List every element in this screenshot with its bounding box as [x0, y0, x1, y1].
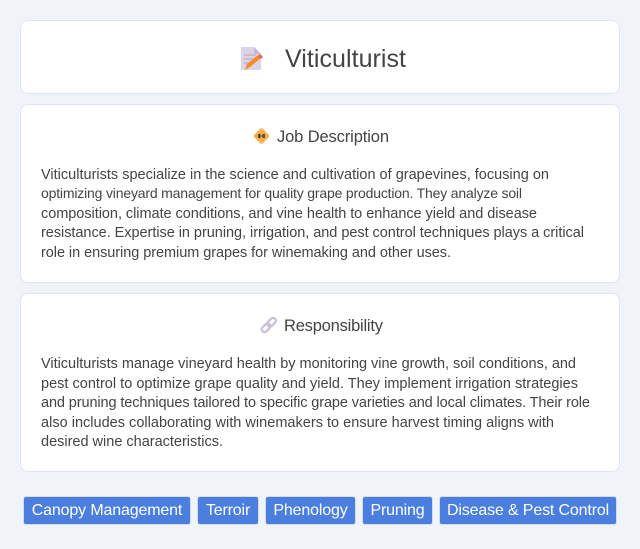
tag: disease and pest control: Disease & Pest Control	[447, 502, 609, 519]
text block: responsibility: also includes collaborating with winemakers to ensure harvest timing aligns with	[41, 415, 554, 431]
tag: terroir: Terroir	[206, 502, 250, 519]
text block: job description	[41, 167, 584, 261]
panel: title	[20, 20, 620, 94]
tag: canopy management: Canopy Management	[32, 502, 182, 519]
heading: responsibility: Responsibility	[284, 317, 384, 335]
text block: responsibility	[41, 356, 590, 450]
icon: diamond sign	[253, 128, 270, 144]
icon: document with pencil	[241, 47, 263, 70]
text block: responsibility: pest control to optimize grape quality and yield. They implement irrigation strategies	[41, 376, 578, 392]
text block: job description: resistance. Expertise in pruning, irrigation, and pest control techniques plays a critical	[41, 225, 584, 241]
tag: terroir	[197, 496, 259, 525]
title text: Viticulturist	[285, 45, 406, 73]
panel: job description	[20, 104, 620, 283]
tag: pruning: Pruning	[370, 502, 425, 519]
text block: job description: optimizing vineyard management for quality grape production. They analyze soil	[41, 185, 522, 201]
text block: job description: composition, climate conditions, and vine health to enhance yield and disease	[41, 206, 537, 222]
heading: job description: Job Description	[277, 128, 389, 146]
text block: responsibility: desired wine characteristics.	[41, 434, 223, 450]
text block: responsibility: and pruning techniques tailored to specific grape varieties and local climates. Their role	[41, 395, 590, 411]
panel: responsibility	[20, 293, 620, 472]
text block: job description: role in ensuring premium grapes for winemaking and other uses.	[41, 245, 451, 261]
text block: job description: Viticulturists specialize in the science and cultivation of grapevines, focusing on	[41, 167, 549, 183]
tag: canopy management	[23, 496, 191, 525]
text block: responsibility: Viticulturists manage vineyard health by monitoring vine growth, soil conditions, and	[41, 356, 576, 372]
tag: phenology	[265, 496, 356, 525]
tag: disease and pest control	[439, 496, 617, 525]
tag: phenology: Phenology	[273, 502, 348, 519]
icon: chain link	[261, 317, 277, 333]
tag: pruning	[362, 496, 433, 525]
